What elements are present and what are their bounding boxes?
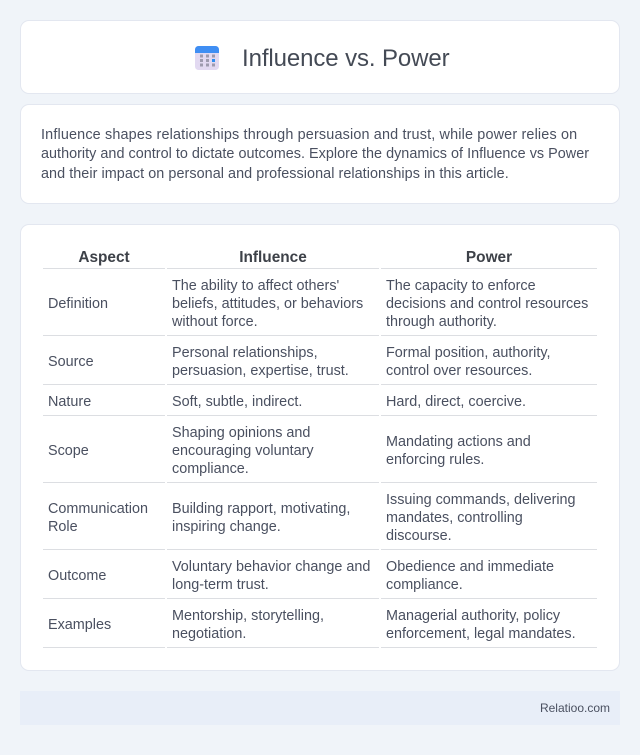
row: scope: Mandating actions and	[386, 434, 531, 450]
table header row	[78, 249, 512, 266]
row: definition: beliefs, attitudes, or behaviors	[172, 296, 363, 312]
row: outcome: compliance.	[386, 577, 463, 593]
row: source: Formal position, authority,	[386, 345, 550, 361]
row: definition	[48, 278, 588, 330]
row: communication role: Communication	[48, 501, 148, 517]
row: examples: enforcement, legal mandates.	[386, 626, 576, 642]
row: scope: Scope	[48, 443, 89, 459]
intro paragraph: Influence shapes relationships through persuasion and trust, while power relies on	[41, 127, 577, 143]
row: scope: compliance.	[172, 461, 249, 477]
row: communication role: Building rapport, motivating,	[172, 501, 350, 517]
row: examples	[48, 608, 576, 642]
icon: calendar	[195, 46, 219, 70]
row: outcome: Outcome	[48, 568, 106, 584]
row: definition: Definition	[48, 296, 108, 312]
row: outcome: long-term trust.	[172, 577, 269, 593]
table header row: Influence	[239, 249, 307, 266]
row: definition: decisions and control resources	[386, 296, 588, 312]
title panel	[20, 20, 620, 94]
intro text panel	[20, 104, 620, 204]
row: source: Personal relationships,	[172, 345, 318, 361]
row: source: persuasion, expertise, trust.	[172, 363, 349, 379]
row: source	[48, 345, 550, 379]
row: communication role: mandates, controlling	[386, 510, 523, 526]
intro paragraph: authority and control to dictate outcomes. Explore the dynamics of Influence vs Power	[41, 146, 589, 162]
row: source: Source	[48, 354, 94, 370]
footer bar	[20, 691, 620, 725]
row: communication role: discourse.	[386, 528, 452, 544]
comparison table panel	[20, 224, 620, 671]
row: definition: The ability to affect others'	[172, 278, 339, 294]
row: examples: negotiation.	[172, 626, 246, 642]
row: scope: enforcing rules.	[386, 452, 484, 468]
row: nature: Soft, subtle, indirect.	[172, 394, 302, 410]
row: nature	[48, 394, 526, 410]
row: examples: Examples	[48, 617, 111, 633]
row: outcome: Voluntary behavior change and	[172, 559, 370, 575]
row: communication role: Role	[48, 519, 78, 535]
row: communication role	[48, 492, 576, 544]
title: Influence vs. Power	[242, 45, 450, 72]
row: nature: Hard, direct, coercive.	[386, 394, 526, 410]
row: scope	[48, 425, 531, 477]
row: nature: Nature	[48, 394, 91, 410]
row: definition: The capacity to enforce	[386, 278, 536, 294]
row: outcome: Obedience and immediate	[386, 559, 554, 575]
intro paragraph: and their impact on personal and professional relationships in this article.	[41, 166, 509, 182]
row: outcome	[48, 559, 554, 593]
row: examples: Managerial authority, policy	[386, 608, 560, 624]
row: examples: Mentorship, storytelling,	[172, 608, 324, 624]
intro paragraph	[41, 127, 589, 182]
table header row: Power	[466, 249, 512, 266]
row: definition: without force.	[172, 314, 258, 330]
footer credit: Relatioo.com	[540, 701, 610, 715]
table header row: Aspect	[78, 249, 130, 266]
row: source: control over resources.	[386, 363, 532, 379]
row: communication role: inspiring change.	[172, 519, 281, 535]
row: scope: encouraging voluntary	[172, 443, 314, 459]
row: communication role: Issuing commands, delivering	[386, 492, 576, 508]
row: definition: through authority.	[386, 314, 497, 330]
row: scope: Shaping opinions and	[172, 425, 310, 441]
